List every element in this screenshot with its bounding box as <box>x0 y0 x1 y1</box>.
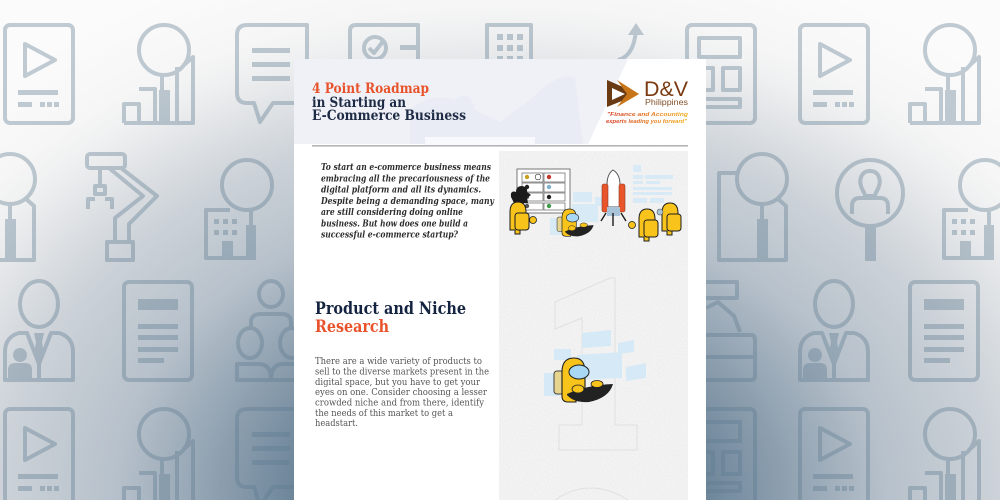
section body text: eyes on one. Consider choosing a lesser <box>315 387 488 398</box>
blue data blocks <box>550 165 673 235</box>
illustration: team launching a startup <box>510 165 681 241</box>
intro text: embracing all the precariousness of the <box>321 173 490 184</box>
title: in Starting an <box>312 95 406 111</box>
crewmate <box>554 358 613 402</box>
crewmate at laptop <box>557 209 594 236</box>
illustration: crewmate researching on laptop <box>544 330 646 402</box>
intro text <box>320 162 495 240</box>
intro text: Despite being a demanding space, many <box>320 196 495 207</box>
header divider <box>312 145 688 147</box>
logo: D&V Philippines: D&V <box>644 78 688 101</box>
product shelf <box>517 169 570 213</box>
icon row 3 <box>5 281 978 380</box>
title <box>312 81 466 124</box>
panel: illustration column <box>499 151 688 500</box>
section heading <box>315 299 466 337</box>
crewmate with hat <box>510 186 536 234</box>
header photo band <box>294 59 628 145</box>
intro text: business. But how does one build a <box>321 218 468 229</box>
icon row 4 <box>5 409 979 500</box>
crewmates watching <box>628 203 681 241</box>
intro text: successful e-commerce startup? <box>321 230 459 240</box>
section body text: crowded niche and from there, identify <box>315 398 485 408</box>
section body text <box>315 356 489 429</box>
intro text: To start an e-commerce business means <box>321 162 491 173</box>
section heading: Product and Niche <box>315 299 466 319</box>
logo: D&V Philippines: experts leading you forward" <box>606 119 687 125</box>
section body text: sell to the diverse markets present in the <box>315 366 489 378</box>
intro text: digital platform and all its dynamics. <box>321 185 481 196</box>
section body text: digital space, but you have to get your <box>315 377 481 388</box>
section body text: the needs of this market to get a <box>315 408 453 419</box>
numeral 1 outline <box>555 278 637 450</box>
logo: D&V Philippines: "Finance and Accounting <box>607 112 689 118</box>
panel: infographic sheet <box>294 59 706 500</box>
logo: D&V Philippines <box>606 78 689 125</box>
rocket <box>601 170 626 226</box>
icon row 1 <box>5 23 979 125</box>
logo: D&V Philippines: Philippines <box>645 98 688 107</box>
intro text: are still considering doing online <box>321 207 463 218</box>
title: 4 Point Roadmap <box>312 81 429 97</box>
blue data blocks <box>544 330 646 396</box>
section body text: There are a wide variety of products to <box>315 356 482 367</box>
title: E-Commerce Business <box>312 108 466 124</box>
section body text: headstart. <box>315 418 358 429</box>
numeral 2 outline top <box>555 488 628 500</box>
icon row 2 <box>0 154 1000 261</box>
section heading: Research <box>315 317 389 337</box>
